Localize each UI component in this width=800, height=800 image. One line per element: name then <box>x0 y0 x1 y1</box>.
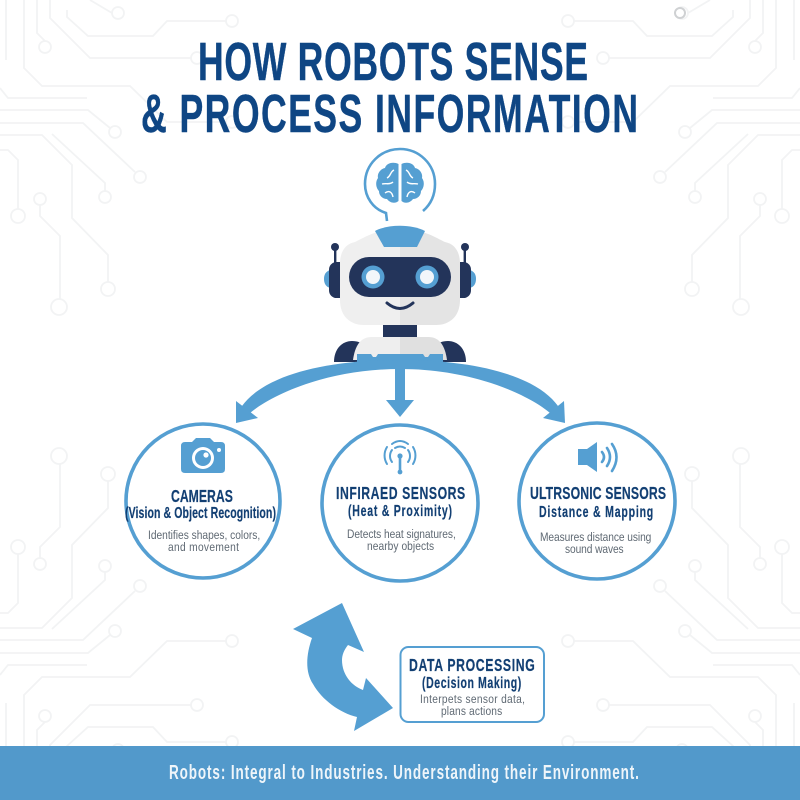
panel: cameras <box>125 424 280 578</box>
description <box>540 531 651 556</box>
arrows: robot to sensors <box>236 360 565 423</box>
heading: INFIRAED SENSORS <box>336 484 465 504</box>
heading: DATA PROCESSING <box>409 656 535 676</box>
description: Detects heat signatures, <box>347 528 456 541</box>
right antenna and ear <box>460 243 476 298</box>
subheading: Distance & Mapping <box>539 503 653 521</box>
torso <box>353 337 447 366</box>
panel: ultrasonic sensors <box>519 423 675 579</box>
footer banner: Robots: Integral to Industries. Understanding their Environment. <box>169 760 639 784</box>
subheading: (Vision & Object Recognition) <box>125 504 276 522</box>
panel: data processing <box>400 647 544 722</box>
description: and movement <box>168 541 240 554</box>
subheading: (Decision Making) <box>422 674 521 692</box>
neck <box>383 325 417 337</box>
left antenna and ear <box>324 243 340 298</box>
description <box>347 528 456 553</box>
description: nearby objects <box>367 540 435 553</box>
description: plans actions <box>441 705 503 718</box>
description: Interpets sensor data, <box>420 693 525 706</box>
description: sound waves <box>565 543 624 556</box>
icon: brain thought bubble <box>365 149 435 221</box>
icon: signal antenna <box>385 441 415 474</box>
footer banner <box>0 746 800 800</box>
description: Identifies shapes, colors, <box>148 529 260 542</box>
title: & PROCESS INFORMATION <box>141 84 638 144</box>
description <box>420 693 525 718</box>
icon: camera <box>181 438 225 473</box>
head <box>340 226 460 325</box>
panel: infrared sensors <box>322 425 478 581</box>
title <box>141 32 638 144</box>
robot <box>324 226 476 366</box>
subheading: (Heat & Proximity) <box>348 502 452 520</box>
shoulders <box>334 341 466 362</box>
heading: ULTRSONIC SENSORS <box>530 484 666 504</box>
description <box>148 529 260 554</box>
arrow: curved feedback <box>293 603 393 731</box>
heading: CAMERAS <box>171 487 233 507</box>
title: HOW ROBOTS SENSE <box>198 32 588 92</box>
description: Measures distance using <box>540 531 651 544</box>
icon: speaker <box>578 442 616 472</box>
